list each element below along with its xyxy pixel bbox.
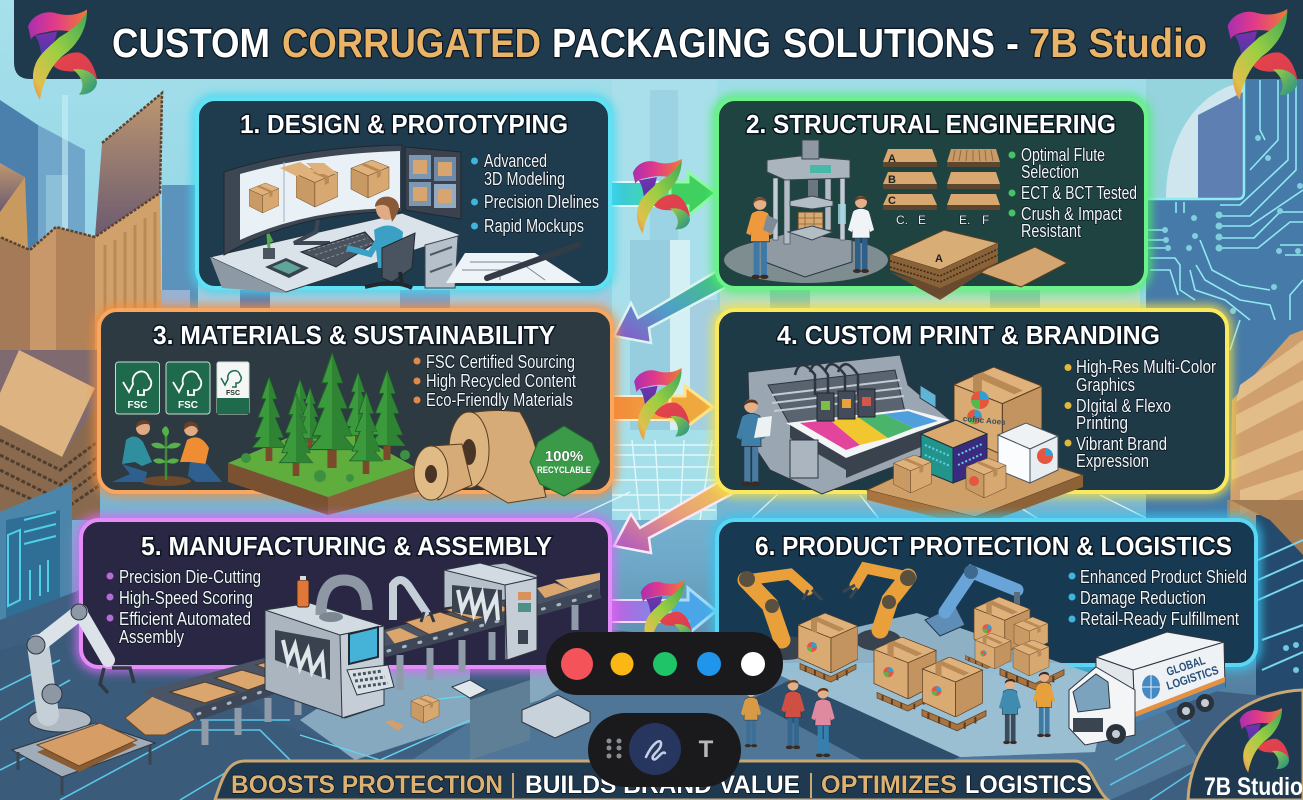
flute samples: C. [896,213,908,227]
flute samples [883,149,1000,227]
left skyline buildings [0,95,198,310]
corrugated cardboard walls left [0,93,162,350]
corrugated stack right [1227,330,1303,530]
bullet list: FSC Certified Sourcing [426,352,575,372]
bullet list [471,151,599,236]
panel 1: design and prototyping [197,99,610,293]
die-cutting machine [265,576,394,718]
lower right circuit area [1230,500,1303,705]
stacked corrugated sheets [890,230,1067,300]
title: - [1006,20,1019,66]
workstation illustration [210,145,581,293]
title: PACKAGING [552,20,771,66]
corrugated board stack left [0,350,100,520]
heading: 3. MATERIALS & SUSTAINABILITY [153,320,555,350]
bullet list: Printing [1076,413,1128,433]
delivery truck: LOGISTICS [1165,663,1220,693]
panel 6: product protection and logistics [717,520,1256,665]
centre city blocks [150,80,1140,430]
bullet list: Vibrant Brand [1076,434,1167,454]
pallet platform and branded boxes: cofnc Aoes [962,414,1006,427]
logistics illustration [738,565,1225,757]
flute samples: A [888,153,896,165]
kraft paper rolls [414,411,546,503]
bullet list: Rapid Mockups [484,216,584,236]
robotic pick arm [393,580,434,622]
compression test press [724,140,888,283]
bullet list: Eco-Friendly Materials [426,390,573,410]
bullet list: Crush & Impact [1021,204,1122,224]
header bar [14,0,1303,79]
bullet list: Precision DIelines [484,192,599,212]
people [741,672,1055,757]
title: SOLUTIONS [783,20,995,66]
colour palette toolbar [546,632,783,695]
bullet list: Expression [1076,451,1149,471]
bullet list: High-Speed Scoring [119,588,253,608]
bullet list [1008,145,1137,241]
bullet list: 3D Modeling [484,169,565,189]
bottom banner [215,761,1108,800]
bullet list: Enhanced Product Shield [1080,567,1247,587]
icon: drag grip [606,738,622,758]
recycling badge: RECYCLABLE [537,465,591,476]
lower-left screen panel [0,482,72,642]
flute samples: C [888,195,896,207]
brand badge bottom right [1188,690,1303,800]
recycling badge [530,426,600,496]
palletised box stacks [798,597,1064,731]
bottom banner: BOOSTS PROTECTION [231,771,503,799]
arrow: step 3 to 4 [612,386,713,428]
digital printer [736,355,950,494]
bullet list [1064,357,1216,471]
loose parts on the floor [385,680,590,738]
arrow: step 1 to 2 [611,172,716,216]
table with cut sheets [12,690,195,795]
assembly line illustration [12,563,600,795]
scoring machine [444,563,537,660]
planting people [112,420,222,486]
title: 7B Studio [1029,20,1207,66]
orange robot arms [739,568,916,660]
bullet list: DIgital & Flexo [1076,396,1171,416]
bullet list: Precision Die-Cutting [119,567,261,587]
right skyscraper and circuit board [1146,79,1303,520]
factory floor [0,590,1303,800]
icon: logo on arrow 3 [634,368,690,440]
robot arm left [27,604,134,732]
upper conveyor [384,572,600,690]
heading: 2. STRUCTURAL ENGINEERING [746,109,1116,139]
icon: 7B logo right [1228,9,1297,100]
perspective grid floor [570,430,1150,520]
bullet list [1068,567,1247,629]
arrow: step 5 to 6 [610,588,716,634]
bullet list: Advanced [484,151,547,171]
bullet list: Resistant [1021,221,1081,241]
recycling badge: 100% [545,448,583,465]
stacked corrugated sheets: A [935,253,943,265]
icon: logo on arrow 5 [641,580,692,647]
FSC badges: FSC [226,390,240,397]
FSC badges: FSC [128,400,148,411]
arrow: step 4 to 5 [614,480,732,553]
bullet list: ECT & BCT Tested [1021,183,1137,203]
title [112,20,1207,66]
bullet list: Selection [1021,162,1079,182]
icon: pen tool [629,723,681,775]
heading: 6. PRODUCT PROTECTION & LOGISTICS [755,531,1232,561]
panel 5: manufacturing and assembly [81,520,610,667]
pallet platform and branded boxes [867,367,1083,527]
heading: 1. DESIGN & PROTOTYPING [240,109,568,139]
bottom banner: BUILDS BRAND VALUE [525,771,800,799]
arrow: step 2 to 3 [614,268,732,343]
bottom banner: OPTIMIZES [821,771,957,799]
title: CORRUGATED [282,20,541,66]
flute samples: B [888,174,896,186]
bullet list: Assembly [119,627,184,647]
panel 2: structural engineering [717,99,1146,300]
title: CUSTOM [112,20,270,66]
tool selector toolbar [588,713,741,787]
heading: 4. CUSTOM PRINT & BRANDING [777,320,1160,350]
forest island [228,353,425,515]
bullet list: High-Res Multi-Color [1076,357,1216,377]
icon: badge logo [1240,708,1289,773]
bottom banner: LOGISTICS [965,771,1092,799]
bullet list: Efficient Automated [119,609,251,629]
bullet list: Damage Reduction [1080,588,1206,608]
lower conveyor [141,652,332,745]
icon: 7B logo left [28,10,97,100]
bullet list: Graphics [1076,375,1135,395]
icon: logo on arrow 1 [633,159,690,233]
bullet list [414,352,576,410]
delivery truck [1069,632,1225,745]
flute samples: E [918,213,926,227]
bullet list: Optimal Flute [1021,145,1105,165]
panel 3: materials and sustainability [99,310,612,515]
bullet list: High Recycled Content [426,371,576,391]
flute samples: E. [959,213,970,227]
flute samples: F [982,213,989,227]
FSC badges: FSC [178,400,198,411]
bullet list [106,567,261,647]
heading: 5. MANUFACTURING & ASSEMBLY [141,531,552,561]
FSC badges [116,362,249,414]
delivery truck: GLOBAL [1165,653,1207,679]
panel 4: custom print and branding [717,310,1227,527]
blue robot arm [925,565,1017,636]
text tool: T [699,736,714,763]
bullet list: Retail-Ready Fulfillment [1080,609,1239,629]
